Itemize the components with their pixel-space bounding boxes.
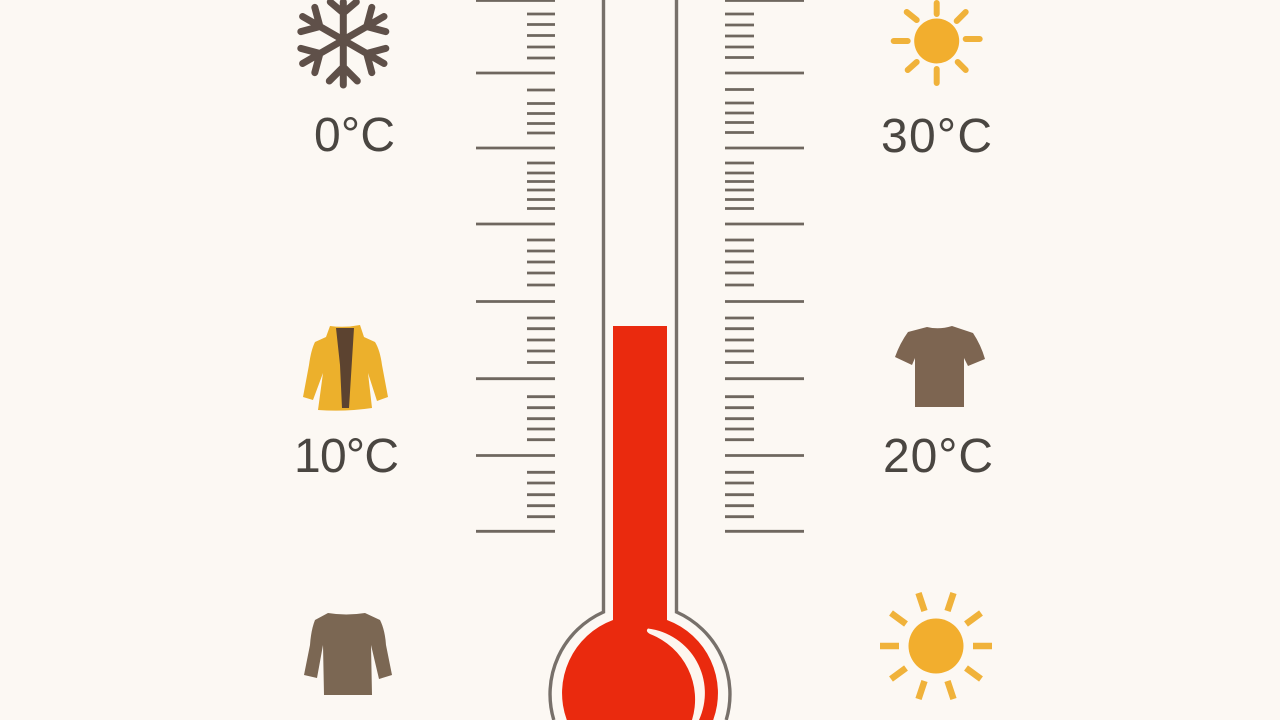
icon: snowflake: [296, 2, 391, 85]
icon: t-shirt: [895, 326, 985, 407]
red mercury column and bulb: [562, 326, 718, 720]
icon: small sun: [894, 3, 980, 83]
bulb highlight: [647, 628, 705, 720]
thermometer glass outline: [550, 0, 730, 720]
left temperature scale: [476, 0, 555, 531]
label: 10°C: 10°C: [294, 430, 399, 483]
label: 0°C: 0°C: [314, 109, 395, 162]
label: 20°C: 20°C: [883, 430, 993, 483]
icon: yellow jacket: [303, 325, 388, 411]
jacket lining: [336, 328, 354, 408]
label: 30°C: 30°C: [881, 110, 992, 163]
thermometer: [550, 0, 730, 720]
icon: long-sleeve shirt: [304, 613, 392, 695]
icon: large sun: [880, 593, 992, 699]
right temperature scale: [725, 0, 804, 531]
